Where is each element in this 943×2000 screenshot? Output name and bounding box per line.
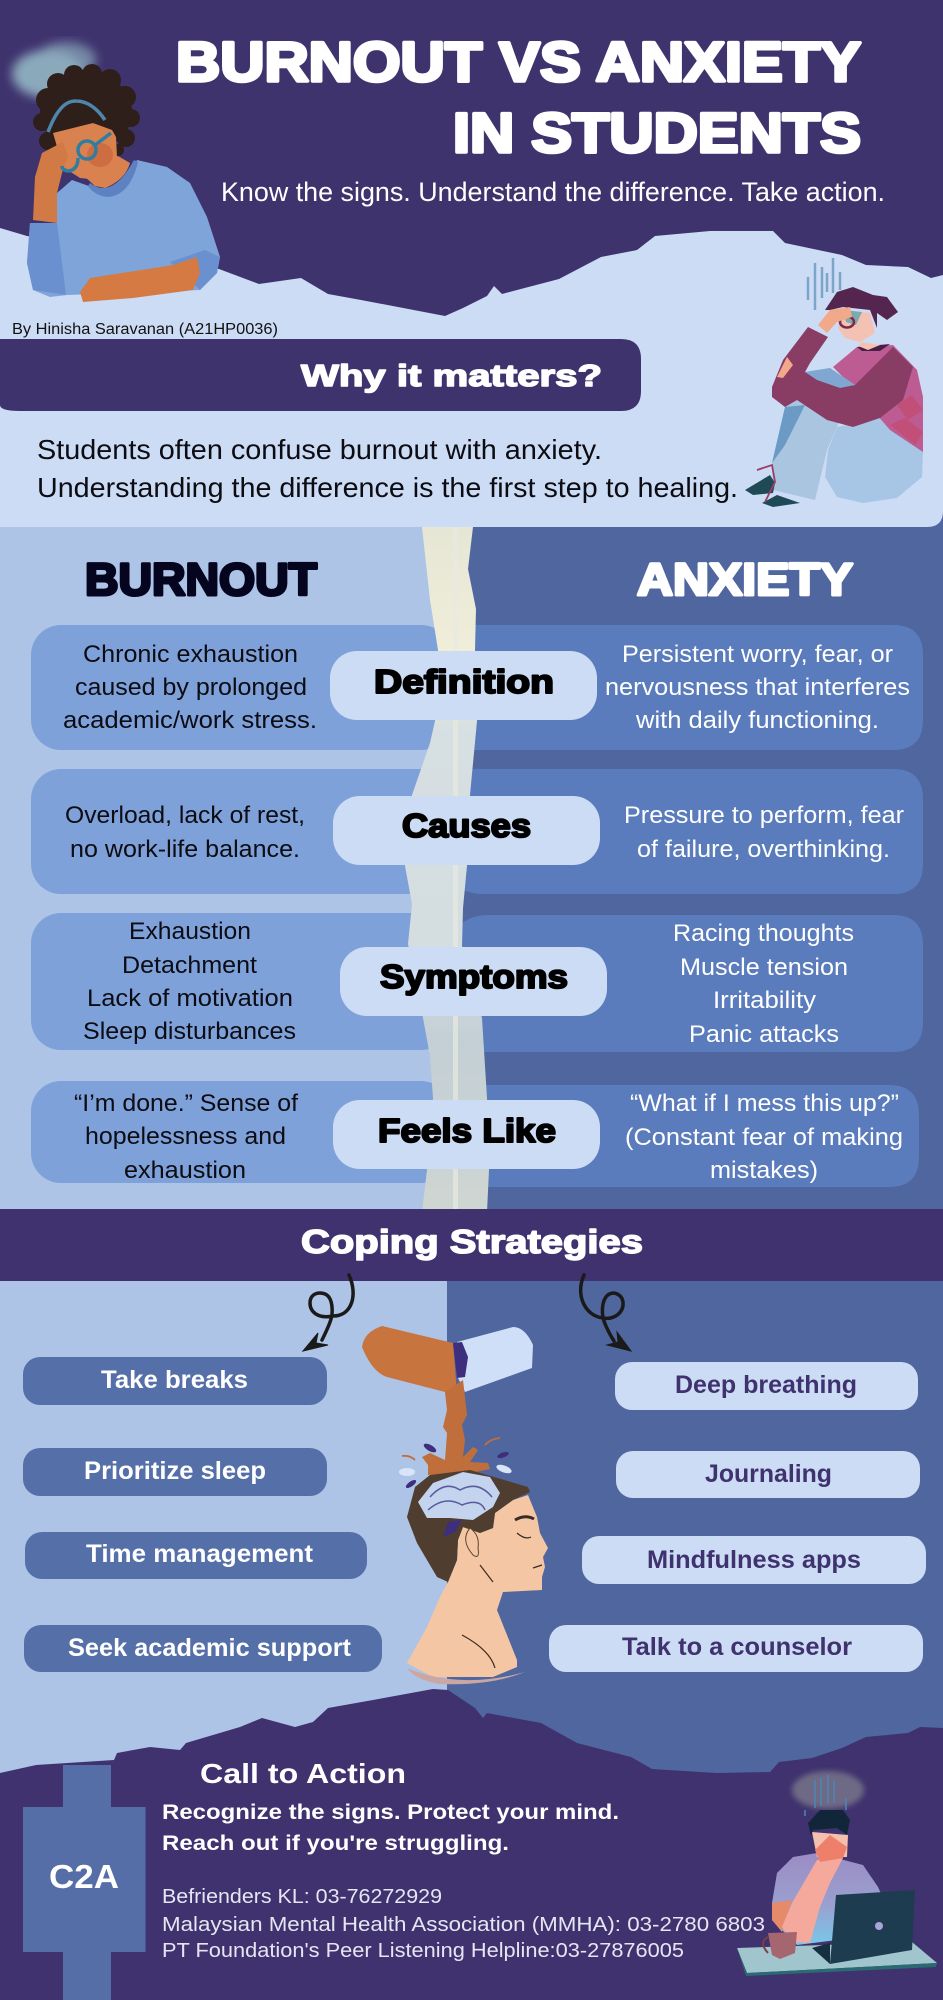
panel: feels like row: “I’m done.” Sense of [74, 1090, 298, 1117]
hair and ponytail [825, 287, 898, 328]
pill: seek academic support [24, 1625, 382, 1672]
face [53, 123, 117, 180]
neck [83, 156, 130, 188]
brain [418, 1472, 500, 1520]
pill: prioritize sleep: Prioritize sleep [84, 1457, 266, 1485]
panel: symptoms row: Lack of motivation [87, 985, 293, 1012]
subtitle: Know the signs. Understand the difference. Take action. [221, 177, 885, 207]
burnout strategy pills [23, 1357, 382, 1672]
column heading: anxiety: ANXIETY [637, 554, 853, 605]
curly hair [33, 64, 140, 156]
panel: definition row [63, 641, 910, 734]
hair fringe and headband [52, 112, 108, 135]
pill: talk to a counselor: Talk to a counselor [622, 1633, 852, 1661]
panel: feels like row: exhaustion [124, 1157, 246, 1184]
panel: definition row: Chronic exhaustion [83, 641, 298, 668]
bottom purple torn shape [0, 1689, 943, 2000]
why it matters text [37, 434, 738, 503]
comparison section background [0, 505, 943, 1215]
panel: symptoms row: Symptoms [380, 958, 568, 995]
helpline list: Malaysian Mental Health Association (MMHA): 03-2780 6803 [162, 1914, 765, 1936]
panel: feels like row: “What if I mess this up?” [630, 1090, 899, 1117]
illustration: worried student at laptop [737, 1771, 937, 1976]
illustration: sitting student with hand on head [745, 258, 923, 507]
panel: symptoms row: Sleep disturbances [83, 1018, 296, 1045]
cloud [12, 42, 96, 98]
pouring liquid and splash [422, 1380, 490, 1475]
body [772, 1853, 884, 1945]
panel: why it matters background [0, 0, 943, 527]
worry lines [808, 258, 840, 310]
sweater body [833, 345, 923, 452]
panel: symptoms row: Detachment [122, 952, 257, 979]
splash drops [399, 1438, 513, 1489]
panel: definition row: Persistent worry, fear, or [622, 641, 893, 668]
helpline list: PT Foundation's Peer Listening Helpline:03-27876005 [162, 1940, 684, 1962]
raised arm [33, 142, 68, 223]
pill: time management: Time management [86, 1540, 314, 1568]
front leg [772, 368, 855, 500]
arrow: right to anxiety strategies [581, 1275, 631, 1351]
panel: definition row: caused by prolonged [75, 674, 307, 701]
glasses [62, 133, 111, 171]
pill: seek academic support: Seek academic support [68, 1634, 352, 1662]
author credit: By Hinisha Saravanan (A21HP0036) [12, 321, 278, 338]
face [812, 1832, 848, 1857]
illustration: tired student with glasses [12, 42, 220, 302]
hand on arm [777, 357, 793, 378]
hair [808, 1810, 850, 1836]
coping strategies heading band: Coping Strategies [301, 1223, 643, 1260]
C2A cross sign [23, 1765, 146, 2000]
rain cloud [792, 1771, 864, 1816]
column heading: burnout: BURNOUT [85, 554, 317, 605]
title [176, 30, 861, 164]
call to action message: Recognize the signs. Protect your mind. [162, 1801, 619, 1824]
C2A cross sign: C2A [49, 1858, 119, 1895]
panel: feels like row: hopelessness and [85, 1123, 286, 1150]
tear strip between columns [405, 527, 489, 1212]
illustration: capsule pouring into head [362, 1326, 548, 1684]
glasses [840, 316, 854, 328]
sweater [27, 160, 220, 297]
panel: causes row: Overload, lack of rest, [65, 802, 305, 829]
panel: definition row: with daily functioning. [635, 707, 879, 734]
title: IN STUDENTS [453, 101, 861, 164]
desk [737, 1942, 937, 1973]
coping strategies heading band [0, 1209, 943, 1281]
row card backgrounds [31, 625, 923, 1187]
helpline list [162, 1886, 765, 1962]
panel: definition row: Definition [374, 663, 554, 700]
panel: feels like row: (Constant fear of making [625, 1124, 903, 1151]
panel: symptoms row [83, 918, 854, 1048]
pill: journaling: Journaling [705, 1460, 832, 1488]
resting arm [80, 257, 200, 302]
why it matters heading bar [0, 339, 641, 411]
panel: symptoms row: Panic attacks [689, 1021, 839, 1048]
pill: journaling [616, 1451, 920, 1498]
pill: talk to a counselor [549, 1625, 923, 1672]
pill: mindfulness apps [582, 1536, 926, 1584]
panel: symptoms row: Irritability [713, 987, 817, 1014]
anxiety strategy pills [549, 1362, 926, 1672]
why it matters text: Students often confuse burnout with anxiety. [37, 434, 602, 465]
panel: definition row: nervousness that interferes [605, 674, 910, 701]
shoes [745, 475, 775, 495]
pill: deep breathing: Deep breathing [675, 1371, 857, 1399]
maroon sleeves [772, 327, 913, 427]
panel: symptoms row: Racing thoughts [673, 920, 854, 947]
pill: take breaks: Take breaks [101, 1366, 248, 1394]
pill: mindfulness apps: Mindfulness apps [647, 1546, 861, 1574]
coping section background [0, 1281, 943, 1811]
call to action message: Reach out if you're struggling. [162, 1832, 509, 1855]
why it matters heading bar: Why it matters? [301, 358, 602, 393]
raised hand [818, 307, 852, 333]
title: BURNOUT VS ANXIETY [176, 30, 861, 93]
capsule halves [362, 1326, 457, 1393]
panel: feels like row [74, 1090, 903, 1184]
pill: time management [25, 1532, 367, 1579]
call to action message [162, 1801, 619, 1855]
ear and face details [466, 1528, 478, 1556]
panel: symptoms row: Exhaustion [129, 918, 251, 945]
panel: feels like row: Feels Like [378, 1112, 556, 1149]
collar [88, 160, 138, 197]
call to action heading: Call to Action [200, 1758, 406, 1789]
panel: definition row: academic/work stress. [63, 707, 317, 734]
arrow: left to burnout strategies [303, 1275, 353, 1351]
arm [782, 1858, 843, 1943]
hair [407, 1470, 530, 1582]
back leg [825, 417, 923, 503]
helpline list: Befrienders KL: 03-76272929 [162, 1886, 442, 1908]
panel: symptoms row: Muscle tension [680, 954, 848, 981]
header purple torn shape [0, 0, 943, 316]
panel: causes row: Causes [402, 807, 531, 844]
head and neck [407, 1495, 548, 1677]
mug [768, 1932, 797, 1959]
panel: causes row: Pressure to perform, fear [624, 802, 904, 829]
panel: causes row: no work-life balance. [70, 836, 300, 863]
pill: deep breathing [615, 1362, 918, 1410]
panel: causes row: of failure, overthinking. [637, 836, 890, 863]
face [838, 310, 875, 342]
panel: feels like row: mistakes) [710, 1157, 818, 1184]
pill: take breaks [23, 1357, 327, 1405]
panel: causes row [65, 796, 904, 865]
laptop [830, 1890, 915, 1964]
why it matters text: Understanding the difference is the first step to healing. [37, 472, 738, 503]
pill: prioritize sleep [23, 1448, 327, 1496]
